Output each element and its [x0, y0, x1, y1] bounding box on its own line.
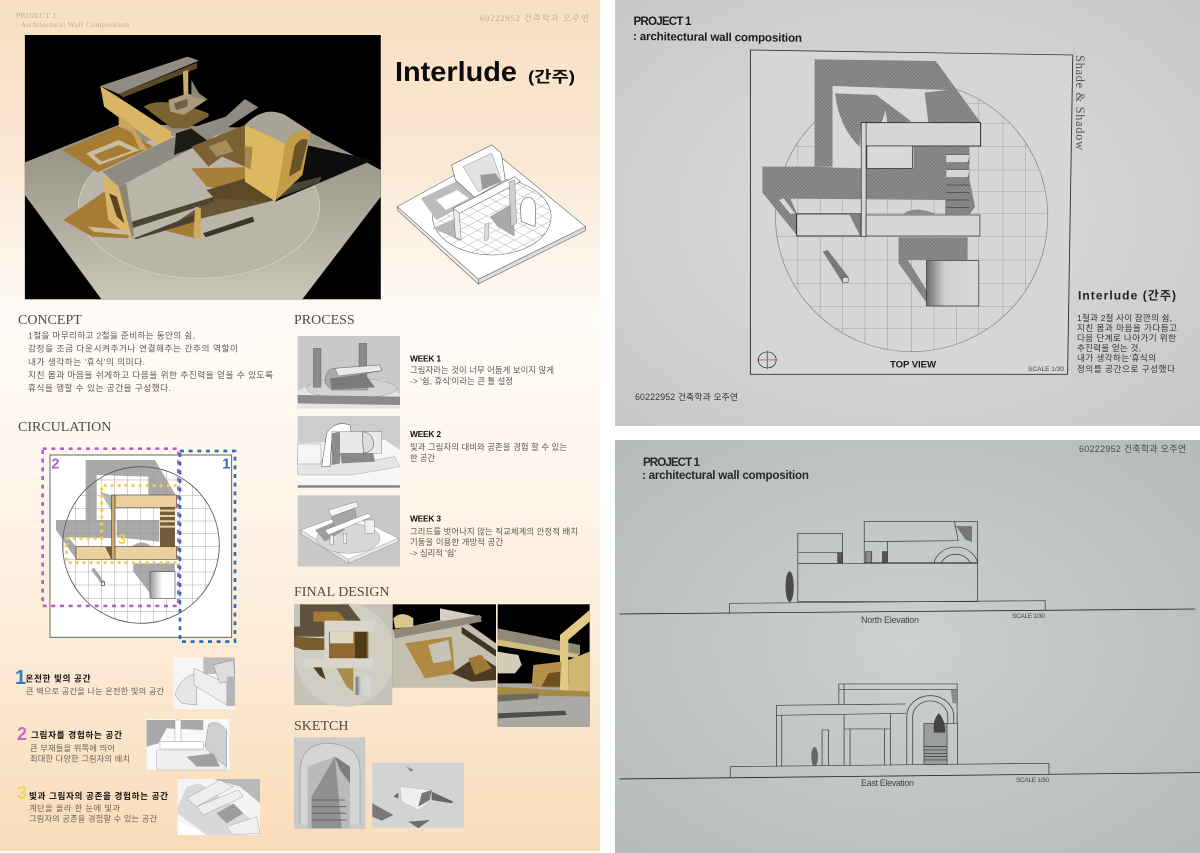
gallery: final design photos	[294, 603, 590, 727]
circulation zone 1	[180, 451, 235, 642]
text: space 2: 큰 부재들을 위쪽에 띄어	[30, 743, 115, 753]
text: interlude summary	[1077, 288, 1177, 374]
text: space 1: 큰 벽으로 공간을 나눈 온전한 빛의 공간	[26, 686, 164, 696]
vault	[245, 112, 311, 143]
text: week 2: 빛과 그림자의 대비와 공존을 경험 할 수 있는	[410, 442, 567, 452]
drawing: north elevation	[619, 522, 1195, 614]
zone numbers: 3	[118, 532, 126, 548]
panel: top view drawing sheet	[615, 0, 1200, 426]
header: student id: 60222952 건축학과 오주연	[480, 13, 589, 23]
poster background	[0, 0, 600, 851]
number 3: 3	[17, 783, 27, 803]
text: space 2: 최대한 다양한 그림자의 배치	[30, 754, 130, 764]
heading: sketch: SKETCH	[294, 719, 348, 734]
image: week 3 model	[298, 495, 400, 567]
text: space 1	[26, 672, 164, 696]
text: week 1	[410, 354, 554, 386]
text: concept body: 감정을 조금 다운시켜주거나 연결해주는 간주의 역할이	[28, 342, 238, 354]
text: week 3: 기둥을 이용한 개방적 공간	[410, 537, 503, 547]
text: week 3: 그리드를 벗어나지 않는 직교체계의 안정적 배치	[410, 526, 578, 536]
text: space 2	[30, 729, 130, 764]
label: north elevation: North Elevation	[861, 615, 919, 625]
text: week 3: WEEK 3	[410, 514, 441, 524]
text: sheet title: : architectural wall composition	[633, 30, 802, 45]
heading: process: PROCESS	[294, 313, 355, 328]
number 1: 1	[15, 667, 26, 689]
text: interlude summary: 정의를 공간으로 구성했다	[1077, 363, 1175, 374]
text: space 1: 온전한 빛의 공간	[26, 672, 91, 684]
text: week 2: 한 공간	[410, 453, 435, 463]
text: concept body: 휴식을 행할 수 있는 공간을 구성했다.	[28, 382, 171, 393]
zone numbers: 2	[51, 457, 59, 473]
heading: circulation: CIRCULATION	[18, 420, 111, 435]
text: space 3: 그림자의 공존을 경험할 수 있는 공간	[29, 814, 157, 824]
label: east scale: SCALE 1/30	[1016, 777, 1049, 784]
label: east elevation: East Elevation	[861, 778, 914, 788]
number 2: 2	[17, 724, 27, 744]
paper background	[615, 0, 1200, 426]
section: circulation	[18, 420, 235, 642]
drawing: east elevation	[619, 684, 1200, 779]
text: sheet title: : architectural wall composition	[642, 469, 809, 482]
text: interlude summary: 내가 생각하는'휴식의	[1077, 352, 1156, 363]
heading: final design: FINAL DESIGN	[294, 585, 390, 600]
image: space 1	[173, 657, 235, 709]
drawing: isometric line model	[397, 145, 586, 284]
sketch: stair arch	[294, 737, 365, 829]
text: interlude summary: 1철과 2철 사이 잠깐의 쉼,	[1077, 313, 1172, 323]
legend: space 2	[17, 719, 229, 770]
text: concept body: 내가 생각하는 '휴식'의 의미다.	[28, 356, 145, 367]
text: space 3: 계단을 올라 한 눈에 빛과	[29, 803, 120, 813]
long beam	[103, 99, 258, 187]
text: week 1: -> '쉼, 휴식'이라는 큰 틀 설정	[410, 376, 513, 386]
chart: circulation plan	[43, 449, 235, 642]
title: Interlude: Interlude	[395, 56, 517, 87]
header: project label: PROJECT 1	[16, 11, 56, 20]
text: interlude summary: 지친 몸과 마음을 가다듬고	[1077, 323, 1177, 333]
section: process	[294, 313, 578, 567]
section: concept	[18, 313, 273, 393]
label: north scale: SCALE 1/30	[1012, 613, 1045, 620]
text: sheet title: PROJECT 1	[634, 15, 692, 28]
text: sheet title	[633, 15, 802, 45]
heading: concept: CONCEPT	[18, 313, 82, 328]
figure: person	[811, 747, 818, 766]
zone numbers	[51, 457, 230, 548]
text: week 3: -> 심리적 '쉼'	[410, 548, 456, 558]
thin wall	[193, 207, 201, 239]
panel: elevation drawing sheet	[615, 440, 1200, 853]
text: space 3	[29, 790, 168, 824]
text: sheet title: PROJECT 1	[643, 456, 701, 469]
figure: person	[786, 571, 794, 602]
header: project label	[16, 11, 129, 29]
section: final design	[294, 585, 590, 727]
text: week 3	[410, 514, 578, 558]
label: student id: 60222952 건축학과 오주연	[635, 392, 738, 402]
text: week 2	[410, 429, 567, 463]
circulation zone 2	[43, 449, 178, 606]
label: scale: SCALE 1/30	[1028, 366, 1064, 373]
label: top view: TOP VIEW	[890, 360, 937, 370]
zone numbers: 1	[222, 457, 230, 473]
title: Interlude: (간주)	[528, 68, 575, 86]
label: shade and shadow: Shade & Shadow	[1073, 55, 1087, 150]
text: week 1: 그림자라는 것이 너무 어둡게 보이지 않게	[410, 365, 554, 375]
panel: left presentation poster	[0, 0, 600, 851]
front column	[103, 173, 134, 238]
back frame	[100, 57, 199, 94]
text: space 3: 빛과 그림자의 공존을 경험하는 공간	[29, 790, 168, 801]
paper background	[615, 440, 1200, 853]
image: week 2 model	[298, 416, 400, 488]
text: week 2: WEEK 2	[410, 429, 441, 439]
photo: hero model render	[25, 35, 381, 299]
text: space 2: 그림자를 경험하는 공간	[31, 729, 122, 740]
photo: interior view	[393, 604, 496, 687]
text: concept body: 지친 몸과 마음을 쉬게하고 다음을 위한 추진력을 얻을 수 있도록	[28, 369, 273, 380]
photo: top view	[294, 603, 395, 707]
section: sketch	[294, 719, 464, 829]
legend: space 1	[15, 657, 235, 709]
text: interlude summary: 추진력을 얻는 것,	[1077, 342, 1141, 353]
icon: compass	[757, 351, 778, 369]
header: project label: : Architectural Wall Composition	[16, 20, 129, 29]
image: space 2	[147, 719, 229, 770]
drawing: shade and shadow top view	[750, 50, 1073, 374]
text: week 1: WEEK 1	[410, 354, 441, 364]
text: interlude summary: Interlude (간주)	[1078, 288, 1176, 302]
text: sheet title	[642, 456, 809, 482]
text: concept body	[28, 330, 273, 393]
gallery: sketches	[294, 737, 464, 829]
sketch: top shadow	[372, 763, 464, 828]
circulation zone 3	[67, 486, 177, 563]
text: concept body: 1철을 마무리하고 2철을 준비하는 동안의 쉼,	[28, 330, 195, 340]
image: week 1 model	[298, 336, 400, 408]
text: interlude summary: 다음 단계로 나아가기 위한	[1077, 332, 1176, 343]
image: space 3	[178, 779, 260, 835]
label: student id: 60222952 건축학과 오주연	[1079, 444, 1186, 454]
title: Interlude	[395, 56, 575, 87]
legend: space 3	[17, 779, 260, 835]
photo: low angle view	[498, 604, 590, 727]
